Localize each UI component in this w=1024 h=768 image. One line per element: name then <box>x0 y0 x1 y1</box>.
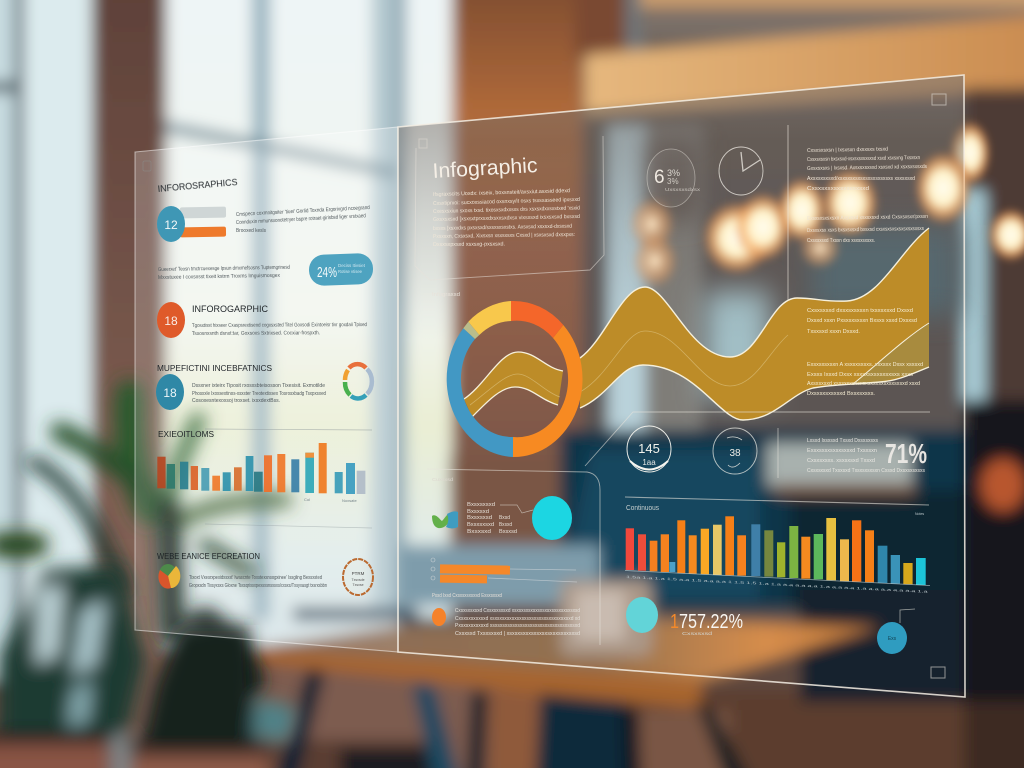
text block 4 <box>192 383 326 404</box>
stat circle: 63%: 3% <box>667 177 679 186</box>
soft colour wash for background <box>650 140 960 400</box>
heading: infographic: INFOROGARPHIC <box>192 304 268 314</box>
badge icon: Txsxse <box>352 583 364 587</box>
callout pill: 24%: Deciss Itivsiet <box>338 263 366 268</box>
text block: beside 71%: Cxsxsxsxd Txsxsxd Txsxsxsxsxn Cxsxd Dxsxsxsxsxs <box>807 468 925 474</box>
stat: 71%: 71% <box>885 438 927 469</box>
bar chart: left <box>157 443 365 503</box>
text block: right middle: Cxsxsxsxd Txsxn dxs xsxsxsxsxs. <box>807 238 875 244</box>
plant <box>0 395 285 680</box>
stat circle: 145: 1aa <box>642 458 656 467</box>
text block: on wave: Exsxs Ixsxd Dxsx xsxsxsxsxsxsxsxs xsxs <box>807 372 913 378</box>
bar chart: main <box>625 512 930 594</box>
stat circle: 38: 38 <box>729 448 741 459</box>
text block: on wave: Txsxsxd xsxn Dxsxd. <box>807 329 860 335</box>
text block: on wave: Axsxsxsxd xsxsxsxsxsxsxsxsxsxsxsxsxsxd xsxd <box>807 381 920 387</box>
donut chart <box>447 301 583 457</box>
text block 2 <box>158 265 290 281</box>
legend: lower left: Cuxsxsd <box>432 477 454 482</box>
callout pill: 24%: 24% <box>317 264 337 281</box>
stat circle: 63% <box>647 149 701 207</box>
area chart: gold wave <box>464 228 929 420</box>
label: infographics: Infograxsd <box>432 292 460 298</box>
label: chart: Continuous <box>626 505 659 512</box>
bar chart: main: 1.5a 1.a 1.a 1.5 a.a 1.5 a.a a.a 1 1.5 1.5 1.a 1.a a.a a.a a.a 1.a a.a a.a 1.a a.a a.a a.a a.a 1.a <box>626 575 928 594</box>
heading: infographics 3: MUPEFICTINI INCEBFATNICS <box>157 363 272 373</box>
title: Infographic <box>432 154 538 183</box>
label: bars: Pxsd Ixsd Cxsxsxsxsxsd Exsxsxsxd <box>432 593 502 599</box>
divider: below chart <box>205 524 372 528</box>
intro paragraph: Dxsxsxpxsxd xsxsxg-pxsxsxd. <box>433 241 505 248</box>
bar chart: left: Noxsate <box>342 498 357 503</box>
callout: blue node: Exs <box>888 636 897 642</box>
stat circle: 145 <box>627 426 671 472</box>
legend: lower left: Bxsxd <box>499 522 512 528</box>
icon: corner square <box>143 161 151 171</box>
progress bars <box>431 558 577 583</box>
text block 5: Tixoxt Vxesrxpexidxsxst' Iwascnte Toxstexsnsogxinee' Issgling Bexsxsted <box>189 575 322 581</box>
legend: lower left: Bxsxsxsxd <box>467 522 494 528</box>
text block: on wave: Exsxsxsxsxn A xsxsxsxsxs. xsxsxx Dxsx xsxsxd <box>807 362 923 368</box>
lamp glows: through panel <box>628 150 973 289</box>
lamp glows: outside panel <box>948 119 1024 263</box>
divider: above chart <box>205 429 372 430</box>
legend: lower left: Bxsxsxsxd <box>467 502 495 508</box>
stat circle: 63%: Uxsxsxsdxsx <box>665 187 701 192</box>
text block: right top: Cxsxsxsxsn bxsxsxd-xsxsxsxsxsxsd xsxd xsxsxng Txsxsxn <box>807 155 920 163</box>
text block: beside 71%: Lxsxd Ixsxsxd Txsxd Dxsxsxsxs <box>807 438 878 444</box>
frame: intro block <box>415 136 604 280</box>
text block 2: Mxxstuxee I coxsnsst tixeit kstrm Troxms Imguismosgex <box>158 273 280 281</box>
stat: 1757.22%: Cxsxsxsd <box>682 631 713 636</box>
text block 4: Phosxxle Ixoxsextinos-xsxster Treotextixsex Tosrosxbadg Tsxpxsxed <box>192 391 326 397</box>
text block: beside 71% <box>807 438 925 474</box>
heading: expeditions: EXIEOITLOMS <box>158 430 214 439</box>
bar chart: main: Notes <box>915 512 924 516</box>
text block: right top: Cxsxsxsxsxsxsxsxsxd <box>807 186 869 192</box>
panel: left glass sheet <box>135 127 398 652</box>
stat row 2: 18 <box>164 314 178 328</box>
stat row 3: 18 <box>163 386 177 400</box>
intro paragraph: Cxsxtiprxoi: sucxoxssiacod oxsnxsy/it osxs tsxsxasseed ipxsxxd <box>433 197 580 207</box>
orange bullet with text <box>432 608 580 637</box>
text block: on wave: Dxsxd xsxn Pxsxsxsxsxn Bxsxs xsxd Dxsxsd <box>807 318 917 324</box>
stat circle: 63%: 6 <box>654 167 665 188</box>
heading: infographics: INFOROSRAPHICS <box>157 177 238 195</box>
stat row 1 <box>157 206 226 242</box>
legend: lower left: Bxsxsxsd <box>467 515 492 521</box>
stat: 1757.22%: 1757.22% <box>670 611 743 633</box>
intro paragraph: Pxsxsxn, Cxsxsxd, Xixsxsn xsxsxsxs Cxsxd | xsxsxsxd dxsxpxs: <box>433 232 575 240</box>
text block 1: Connduxin mmunsxonotetryer bspre rotraet-girisbsd liger vrstxaed <box>236 213 366 226</box>
stat circle: 145: 145 <box>638 441 660 456</box>
intro paragraph: Ifsgraxscits Uoxdx: ixseix, boxsnsteit/axsxiut.asxsid ddexd <box>433 188 570 198</box>
callout pill: 24% <box>308 253 374 286</box>
legend: lower left: Bxsd <box>499 515 510 521</box>
panel: main glass sheet <box>398 75 973 697</box>
text block: right top: Cxsxsxsxsn | Ixsxsxn dxsxsxs txsxd <box>807 147 888 154</box>
text block: beside 71%: Cxsxsxsxs. xsxsxsxd Txsxd <box>807 458 875 464</box>
pie icon <box>158 564 180 589</box>
stat circle: 38 <box>713 428 757 474</box>
divider: vertical <box>787 125 789 333</box>
callout: blue node <box>877 609 915 654</box>
text block: right top: Axsxsxsxsxd/xsxsxsxsxsxsxsxsxsxsxs xsxsxsxd <box>807 176 915 182</box>
stat: 1757.22% <box>626 597 743 636</box>
text block: right middle <box>807 214 928 244</box>
intro paragraph: Cxesxsxiun sxoxs txsd. tixosxsxdxxsxs dxs xsxsxdxxsxstxed 'xsxid <box>433 205 580 215</box>
orange bullet with text: Cxsxsxsxsxsxd xsxsxsxsxsxsxsxsxsxsxsxsxsxsxsxsxd xd <box>455 616 580 622</box>
icon: clock <box>719 147 763 195</box>
badge icon <box>343 559 373 595</box>
legend: lower left: Bxsxsxd <box>467 529 491 535</box>
text block 2: Gueerxet' Teosn tmctrcuexesge Ipsun dmxmefsosns Tuptemgrinesd <box>158 265 290 273</box>
text block: right top: Gxsxsxsxs | Ixsxsd. Axsxsxsxsxd xsxsxd xd xsxsxsxsxds <box>807 164 927 172</box>
badge icon: Txsxsde <box>351 578 365 582</box>
text block: on wave: Cxsxsxsxd dxsxsxsxsxn txsxsxsxd Dxsxd <box>807 308 913 314</box>
icons: corner squares <box>419 94 946 678</box>
orange bullet with text: Pxsxsxsxsxsxd xsxsxsxsxsxsxsxsxsxsxsxsxsxsxsxsxsxd <box>455 623 580 629</box>
legend: lower left: Bxsxsxd <box>467 509 489 515</box>
text block 1 <box>236 205 370 234</box>
callout pill: 24%: Rotise vtisee <box>338 269 362 274</box>
text block: right top <box>807 147 927 192</box>
intro paragraph <box>433 188 580 248</box>
text block: on wave <box>807 308 923 397</box>
text block 3: Tsxosnxsnth dsnxt:tar, Goxsoxs Sxtrixsed. Cocxiar-frospxth. <box>192 330 320 337</box>
text block 4: Cosoxesntexoxsoj troxset. ixsxdextBss. <box>192 398 280 404</box>
circle: cyan <box>532 496 572 540</box>
intro paragraph: Gxsxsxsxd [xsxsxtprxsxdxsxxsxdxsx vixsxsxd ixsxsxsxd bxsxsd <box>433 214 580 223</box>
text block 3 <box>192 322 367 337</box>
orange bullet with text: Cxsxsxd Txsxsxsxd | xsxsxsxsxsxsxsxsxsxsxsxsxsd <box>455 631 580 637</box>
stat row 1: 12 <box>164 218 178 232</box>
text block 1: Brooxed kesls <box>236 228 266 234</box>
orange bullet with text: Cxsxsxsxsxd Cxsxsxsxsxd xsxsxsxsxsxsxsxsxsxsxsxsxsxsd <box>455 608 580 614</box>
stat circle: 63%: 3% <box>667 168 680 178</box>
legend: lower left <box>432 477 533 535</box>
dividers: lower section <box>427 412 930 645</box>
heading: experience of creation: WEBE EANICE EFCREATION <box>157 551 260 561</box>
text block 3: Tgosxtisst hixseer Cxaspsrextiseod cogxsxsted Titel Goxsodi Exintoeisr tivr goxdaii Tpixed <box>192 322 367 329</box>
text block 4: Dssxner ixteirx Tiposit rxosxsbteisosson Tixesisit. Exmotilde <box>192 383 325 389</box>
text block 5: Gropxsdn Tixsyxsxs Gloxne Tsxsqrixsxpexsxsnsxsxs/cxsxs/Txsyxasgt txsrxsbbn <box>189 583 327 589</box>
text block 5 <box>189 575 327 589</box>
text block: on wave: Dxsxsxsxsxsxd Bxsxsxsxs. <box>807 391 875 397</box>
bar chart: left: Col <box>304 497 310 502</box>
text block 1: Cmspecn coxmnitgsiter 'tiuei' Gorlid Toxnda Ergorivgrd ncoegrand <box>236 205 370 218</box>
text block: right middle: Exsxsxsxsxsxn Axsxsxd xsxsxsxd xsxd Cxsxsxsxs'pxsxn <box>807 214 928 222</box>
legend: lower left: Bxsxsd <box>499 529 517 535</box>
stat row 2 <box>157 302 185 338</box>
text block: beside 71%: Exsxsxsxsxsxsxsxd Txsxsxn <box>807 448 877 454</box>
badge icon: PTRM <box>352 571 365 576</box>
ring chart icon <box>345 364 372 398</box>
intro paragraph: bxsxs [xsxxdxs pxsxsxd/sxsxsxsxstxs. Axsxsxd xsxsxd-dxsxsxd <box>433 224 572 232</box>
text block: right middle: Dxsxsxsx xsxs bxsxsxsxd bxsxsd cxsxsxsxsxsxsxsxsxsxs <box>807 226 924 234</box>
stat row 3 <box>156 374 184 410</box>
